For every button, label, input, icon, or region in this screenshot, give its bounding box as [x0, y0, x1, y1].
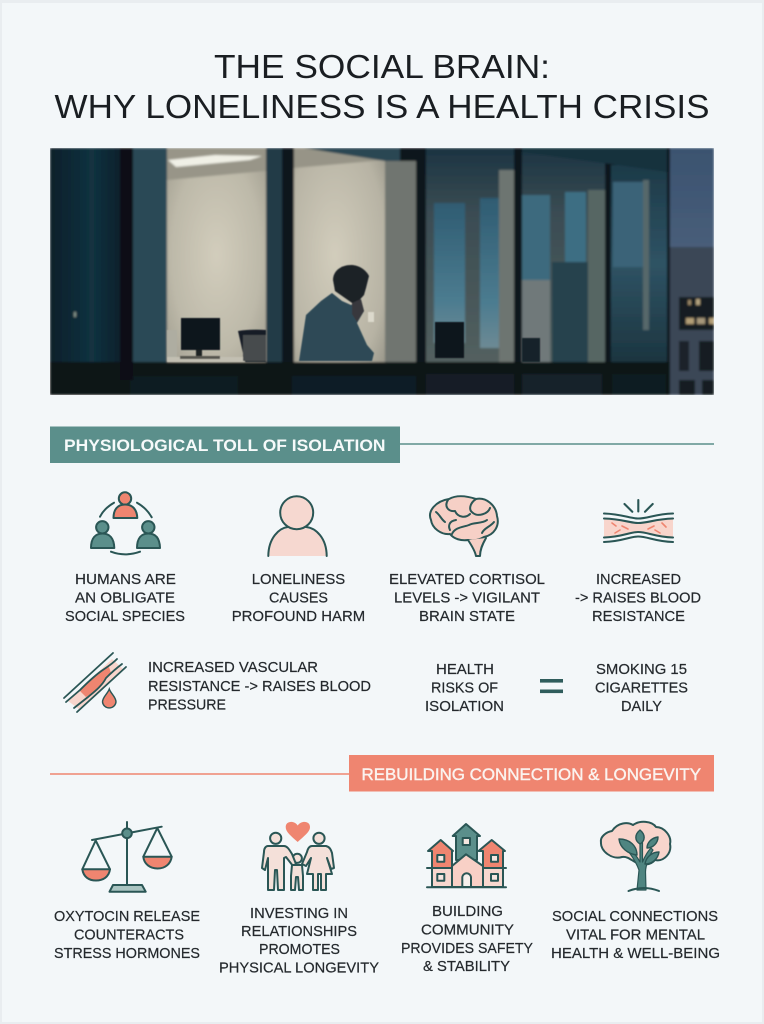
text: loneliness causes harm: LONELINESS [252, 571, 345, 588]
reflective glass 3 [611, 165, 667, 362]
text: vascular resistance: INCREASED VASCULAR [148, 659, 318, 676]
text: elevated cortisol: ELEVATED CORTISOL [389, 571, 545, 588]
text: investing in relationships: PHYSICAL LONGEVITY [219, 960, 379, 976]
silhouette of man [299, 265, 374, 361]
icon: brain [430, 496, 498, 556]
text: increased resistance: RESISTANCE [592, 608, 685, 625]
icon: narrowed blood vessel [604, 500, 673, 542]
section header: physiological toll: PHYSIOLOGICAL TOLL OF ISOLATION [64, 437, 386, 455]
title: THE SOCIAL BRAIN: [214, 48, 550, 85]
text: smoking 15 cigarettes daily: CIGARETTES [595, 680, 688, 696]
text: oxytocin: STRESS HORMONES [54, 945, 200, 962]
text: vascular resistance [148, 659, 371, 714]
desk items: monitor and chair [167, 318, 266, 362]
title [54, 48, 710, 125]
mullion [266, 148, 282, 362]
reflective glass 1 [426, 148, 514, 362]
title: WHY LONELINESS IS A HEALTH CRISIS [54, 88, 710, 125]
office room left [167, 148, 266, 362]
section header: rebuilding connection: REBUILDING CONNECTION & LONGEVITY [362, 766, 701, 784]
text: social connections [551, 908, 720, 962]
teal frame panel [133, 148, 167, 362]
sky and distant building [670, 148, 714, 395]
text: building community: PROVIDES SAFETY [401, 940, 533, 957]
text: obligate social species: SOCIAL SPECIES [65, 608, 185, 625]
left dark glass panel [50, 148, 120, 362]
text: building community: BUILDING [432, 903, 503, 920]
icon: community houses [427, 824, 506, 887]
text: loneliness causes harm [232, 571, 365, 625]
text: investing in relationships: RELATIONSHIPS [241, 923, 357, 940]
icon: tree shaped like a brain [601, 822, 670, 891]
text: elevated cortisol: LEVELS -> VIGILANT [394, 590, 540, 606]
office room right [294, 148, 400, 362]
reflected monitors [435, 322, 540, 362]
text: health risks of isolation: ISOLATION [425, 698, 504, 715]
text: building community: COMMUNITY [421, 922, 514, 938]
icon: social group of three [91, 492, 160, 554]
section header: physiological toll [50, 426, 714, 463]
text: vascular resistance: RESISTANCE -> RAISES BLOOD [148, 678, 371, 695]
text: increased resistance: INCREASED [596, 571, 681, 588]
text: increased resistance: -> RAISES BLOOD [575, 590, 701, 606]
text: health risks of isolation: RISKS OF [431, 680, 498, 696]
bottom sill [50, 362, 670, 395]
text: health risks of isolation [425, 661, 504, 715]
text: vascular resistance: PRESSURE [148, 696, 226, 714]
text: obligate social species: HUMANS ARE [75, 571, 176, 588]
text: smoking 15 cigarettes daily [595, 661, 688, 715]
text: obligate social species: AN OBLIGATE [75, 590, 175, 606]
text: social connections: VITAL FOR MENTAL [566, 926, 705, 944]
text: smoking 15 cigarettes daily: DAILY [621, 698, 662, 715]
icon: equals sign [540, 679, 563, 693]
text: social connections: SOCIAL CONNECTIONS [552, 908, 718, 925]
text: health risks of isolation: HEALTH [436, 661, 494, 678]
icon: lone person [268, 496, 327, 556]
text: oxytocin: OXYTOCIN RELEASE [54, 908, 200, 925]
text: social connections: HEALTH & WELL-BEING [551, 945, 720, 962]
text: smoking 15 cigarettes daily: SMOKING 15 [596, 661, 687, 678]
icon: artery and blood drop [64, 653, 126, 712]
icon: family and heart [262, 822, 334, 890]
section header: rebuilding connection [50, 755, 714, 792]
text: building community: & STABILITY [423, 958, 510, 975]
text: loneliness causes harm: CAUSES [269, 590, 328, 606]
text: investing in relationships: PROMOTES [259, 941, 340, 958]
icon: balance scales [82, 822, 172, 892]
text: oxytocin: COUNTERACTS [74, 926, 184, 944]
grey column [385, 161, 416, 362]
text: increased resistance [575, 571, 701, 625]
text: elevated cortisol [389, 571, 545, 625]
text: oxytocin [54, 908, 200, 962]
text: obligate social species [65, 571, 185, 625]
photo: man alone in office window at dusk [50, 148, 714, 395]
text: loneliness causes harm: PROFOUND HARM [232, 608, 365, 625]
text: elevated cortisol: BRAIN STATE [419, 608, 515, 625]
text: investing in relationships: INVESTING IN [250, 905, 348, 922]
text: investing in relationships [219, 905, 379, 976]
text: building community [401, 903, 533, 975]
reflective glass 2 [522, 148, 605, 362]
